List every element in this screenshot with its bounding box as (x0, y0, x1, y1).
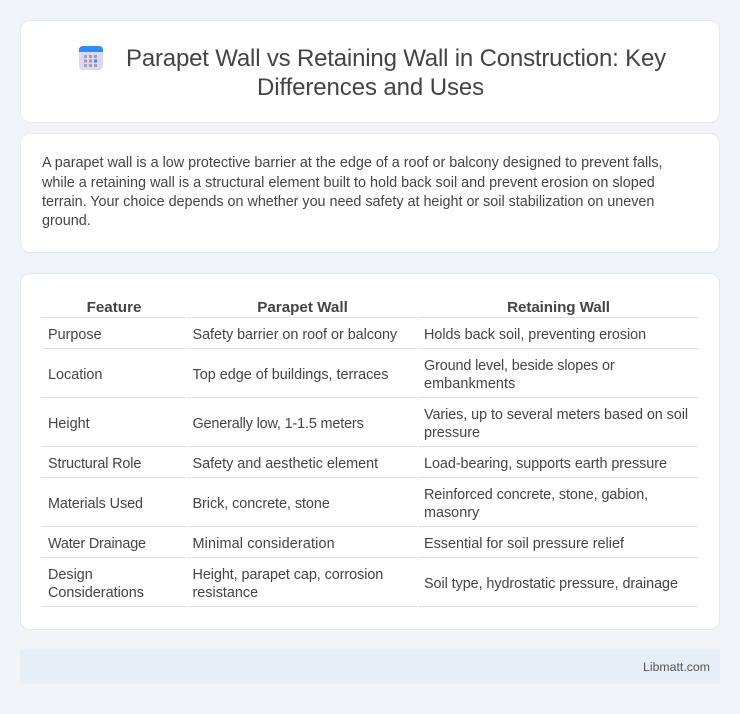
row: Height: Generally low, 1-1.5 meters (192, 416, 364, 432)
row: Location: Top edge of buildings, terraces (192, 367, 388, 383)
row: Location (48, 358, 614, 392)
row: Location: embankments (424, 376, 515, 392)
intro paragraph (42, 155, 663, 229)
row: Structural Role (48, 456, 667, 472)
row: Water Drainage: Water Drainage (48, 536, 146, 552)
row: Water Drainage: Minimal consideration (192, 536, 335, 552)
row: Height (48, 407, 688, 441)
row: Height: Varies, up to several meters based on soil (424, 407, 688, 423)
row: Design Considerations: resistance (192, 585, 258, 601)
title: Parapet Wall vs Retaining Wall in Construction: Key (126, 45, 666, 72)
row: Materials Used: Reinforced concrete, stone, gabion, (424, 487, 648, 503)
panel: title header (20, 20, 720, 123)
intro paragraph: while a retaining wall is a structural element built to hold back soil and prevent erosion on sloped (42, 175, 655, 191)
row: Location: Ground level, beside slopes or (424, 358, 614, 374)
footer bar (20, 650, 720, 684)
row: Structural Role: Structural Role (48, 456, 141, 472)
panel: comparison table (20, 273, 720, 630)
row: Height: Height (48, 416, 90, 432)
row: Water Drainage (48, 536, 624, 552)
row: Purpose (48, 327, 646, 343)
row: Structural Role: Load-bearing, supports earth pressure (424, 456, 667, 472)
row: Purpose: Purpose (48, 327, 102, 343)
row: Design Considerations (48, 567, 678, 601)
intro paragraph: A parapet wall is a low protective barrier at the edge of a roof or balcony designed to prevent falls, (42, 155, 663, 171)
title (126, 45, 666, 101)
row: Purpose: Safety barrier on roof or balcony (192, 327, 397, 343)
title: Differences and Uses (257, 74, 484, 101)
table header row: Retaining Wall (507, 299, 610, 316)
row: Materials Used (48, 487, 648, 521)
panel: intro text (20, 133, 720, 253)
table header row: Feature (87, 299, 141, 316)
row: Design Considerations: Soil type, hydrostatic pressure, drainage (424, 576, 678, 592)
row: Materials Used: Brick, concrete, stone (192, 496, 330, 512)
row: Water Drainage: Essential for soil pressure relief (424, 536, 624, 552)
row: Structural Role: Safety and aesthetic element (192, 456, 378, 472)
row: Design Considerations: Considerations (48, 585, 144, 601)
table header row: Parapet Wall (257, 299, 348, 316)
row: Design Considerations: Height, parapet cap, corrosion (192, 567, 383, 583)
row: Materials Used: masonry (424, 505, 479, 521)
intro paragraph: terrain. Your choice depends on whether you need safety at height or soil stabilization on uneven (42, 194, 654, 210)
table header row (87, 299, 610, 316)
icon: calendar (79, 46, 103, 70)
row: Location: Location (48, 367, 102, 383)
footer credit: Libmatt.com (643, 660, 710, 674)
row: Purpose: Holds back soil, preventing erosion (424, 327, 646, 343)
row: Design Considerations: Design (48, 567, 93, 583)
row: Materials Used: Materials Used (48, 496, 143, 512)
row: Height: pressure (424, 425, 480, 441)
intro paragraph: ground. (42, 213, 91, 229)
